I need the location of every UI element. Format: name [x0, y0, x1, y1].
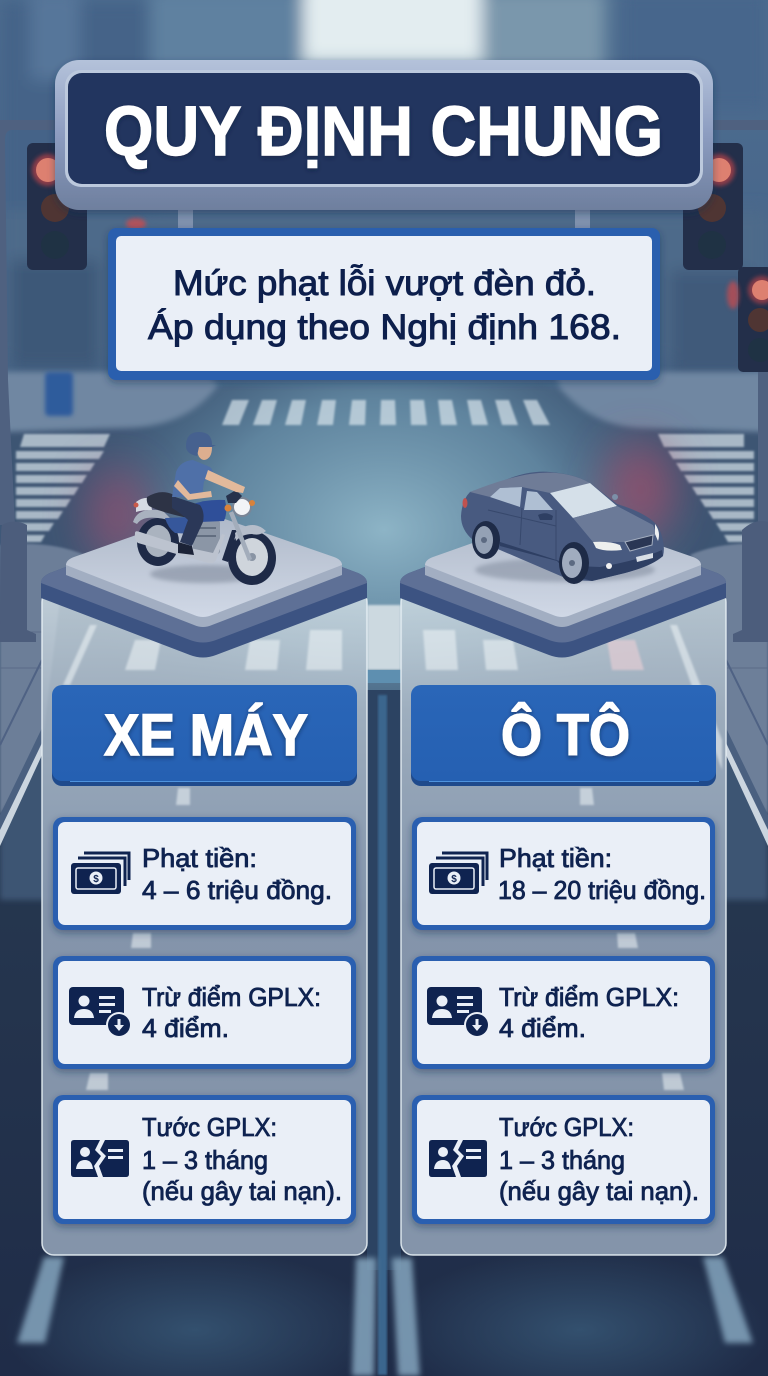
red glow — [88, 467, 148, 563]
panel: ô tô — [400, 472, 726, 1255]
text: trừ điểm: 4 điểm. — [499, 1013, 586, 1043]
card: tước GPLX — [53, 1095, 356, 1224]
text: tước GPLX: Tước GPLX: — [499, 1112, 634, 1142]
platform — [41, 514, 367, 658]
text: tước GPLX — [499, 1112, 699, 1206]
text: phạt tiền — [142, 843, 332, 905]
text: trừ điểm — [142, 982, 321, 1043]
text: tước GPLX: 1 – 3 tháng — [142, 1145, 268, 1175]
text: tước GPLX — [142, 1112, 342, 1206]
traffic light: far right — [727, 267, 768, 642]
subtitle text: Mức phạt lỗi vượt đèn đỏ. — [173, 264, 596, 303]
card: phạt tiền — [53, 817, 356, 930]
icon: car — [461, 472, 664, 584]
badge: xe máy — [52, 685, 357, 786]
icon: licence points down — [427, 987, 490, 1038]
lane markings — [0, 728, 42, 835]
text: trừ điểm — [499, 982, 679, 1043]
icon: banknotes — [71, 853, 129, 894]
title text: QUY ĐỊNH CHUNG — [104, 92, 663, 170]
text: tước GPLX: (nếu gây tai nạn). — [499, 1176, 699, 1206]
text: phạt tiền: 4 – 6 triệu đồng. — [142, 875, 332, 905]
icon: banknotes: $ — [451, 874, 457, 885]
platform — [400, 514, 726, 658]
lower sidewalks — [0, 544, 85, 815]
icon: torn licence — [429, 1140, 487, 1177]
text: phạt tiền: Phạt tiền: — [142, 843, 257, 873]
icon: banknotes: $ — [93, 874, 99, 885]
badge: ô tô — [411, 685, 716, 786]
text: tước GPLX: Tước GPLX: — [142, 1112, 277, 1142]
card: trừ điểm — [53, 956, 356, 1069]
badge: xe máy: XE MÁY — [104, 703, 308, 768]
text: tước GPLX: 1 – 3 tháng — [499, 1145, 625, 1175]
badge: ô tô: Ô TÔ — [501, 703, 630, 768]
text: tước GPLX: (nếu gây tai nạn). — [142, 1176, 342, 1206]
icon: licence points down — [69, 987, 132, 1038]
subtitle box — [108, 228, 660, 380]
card: tước GPLX — [412, 1095, 715, 1224]
road — [0, 385, 768, 900]
text: phạt tiền: Phạt tiền: — [499, 843, 612, 873]
subtitle text — [148, 264, 621, 347]
card: phạt tiền — [412, 817, 715, 930]
text: phạt tiền — [498, 843, 706, 905]
icon: banknotes — [429, 853, 487, 894]
traffic light: left — [0, 120, 146, 642]
sign posts — [178, 200, 590, 232]
text: trừ điểm: 4 điểm. — [142, 1013, 229, 1043]
icon: torn licence — [71, 1140, 129, 1177]
traffic light: right — [683, 120, 768, 270]
card: trừ điểm — [412, 956, 715, 1069]
text: trừ điểm: Trừ điểm GPLX: — [499, 982, 679, 1012]
text: trừ điểm: Trừ điểm GPLX: — [142, 982, 321, 1012]
panel: xe máy — [41, 432, 367, 1255]
crosswalks — [16, 400, 754, 542]
text: phạt tiền: 18 – 20 triệu đồng. — [498, 875, 706, 905]
icon: motorcycle with rider — [133, 432, 276, 585]
title sign — [55, 60, 713, 210]
subtitle text: Áp dụng theo Nghị định 168. — [148, 308, 621, 347]
upper sidewalks — [0, 372, 218, 432]
